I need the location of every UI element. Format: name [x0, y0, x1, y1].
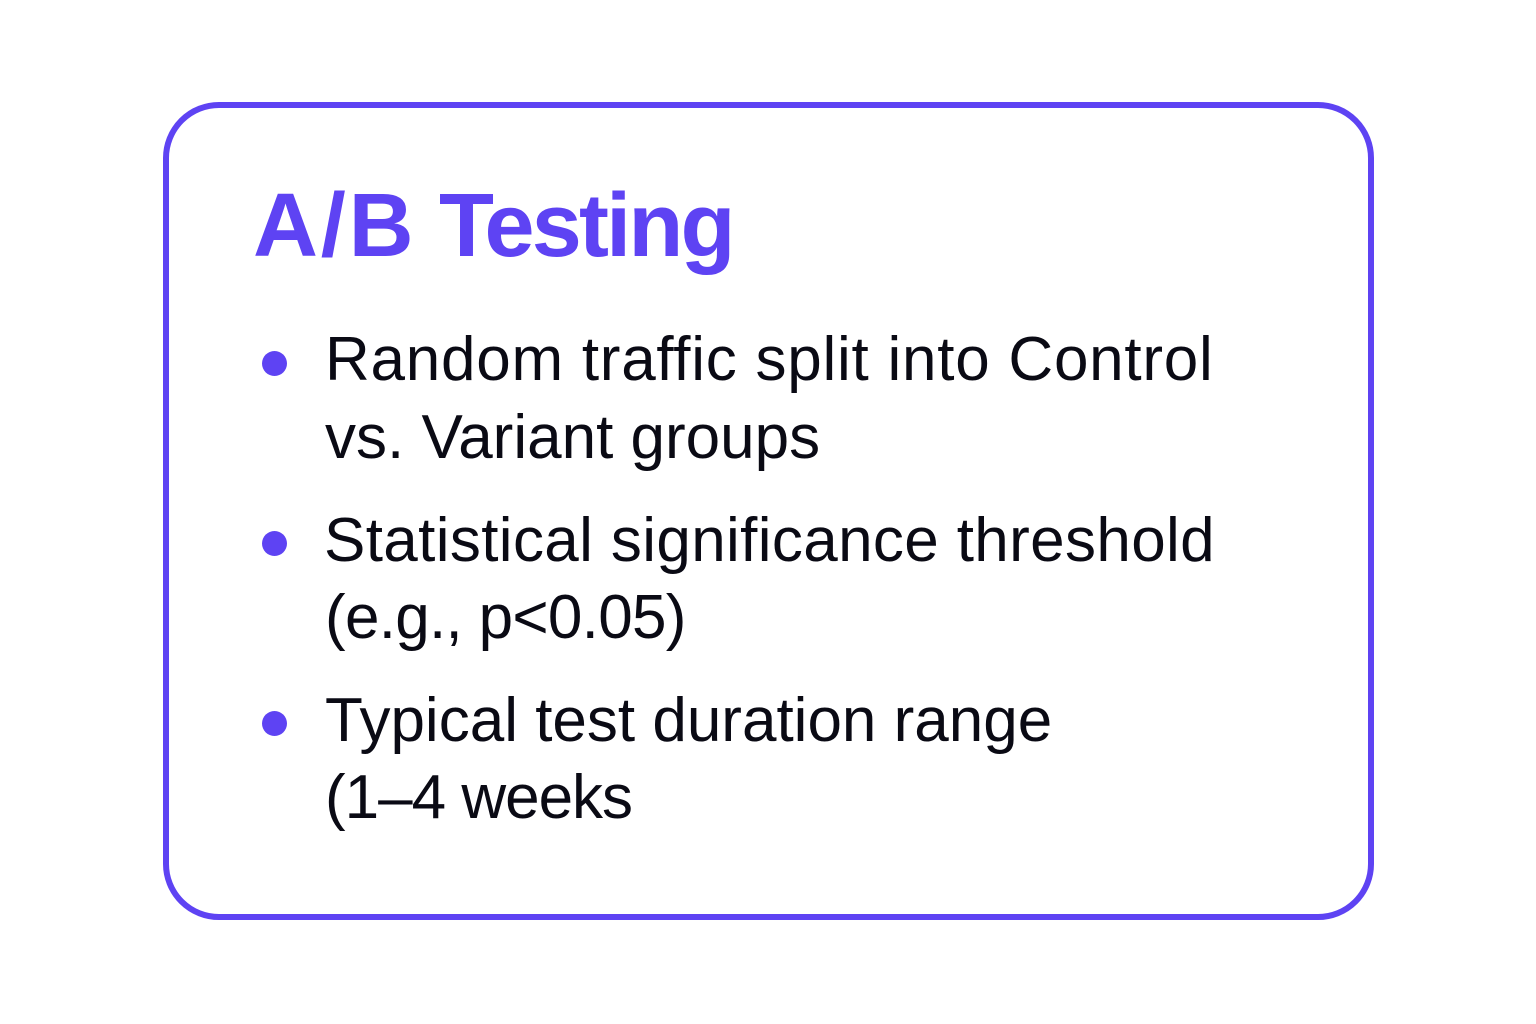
text: test duration: Typical test duration range — [325, 686, 1052, 755]
title: A/B — [253, 176, 416, 276]
bullet icon 2 — [262, 531, 287, 556]
text: test duration — [325, 686, 1052, 832]
panel: A/B testing card — [163, 102, 1374, 920]
text: random traffic split: Random traffic split into Control — [325, 325, 1214, 394]
text: statistical significance: Statistical significance threshold — [324, 506, 1215, 575]
text: random traffic split — [325, 325, 1214, 472]
text: random traffic split: vs. Variant groups — [325, 403, 820, 472]
text: test duration: (1–4 weeks — [325, 763, 632, 832]
text: statistical significance: (e.g., p<0.05) — [325, 583, 686, 652]
bullet icon 3 — [262, 711, 287, 736]
title — [253, 176, 733, 276]
title: Testing — [439, 176, 733, 276]
bullet icon 1 — [262, 351, 287, 376]
text: statistical significance — [324, 506, 1215, 652]
